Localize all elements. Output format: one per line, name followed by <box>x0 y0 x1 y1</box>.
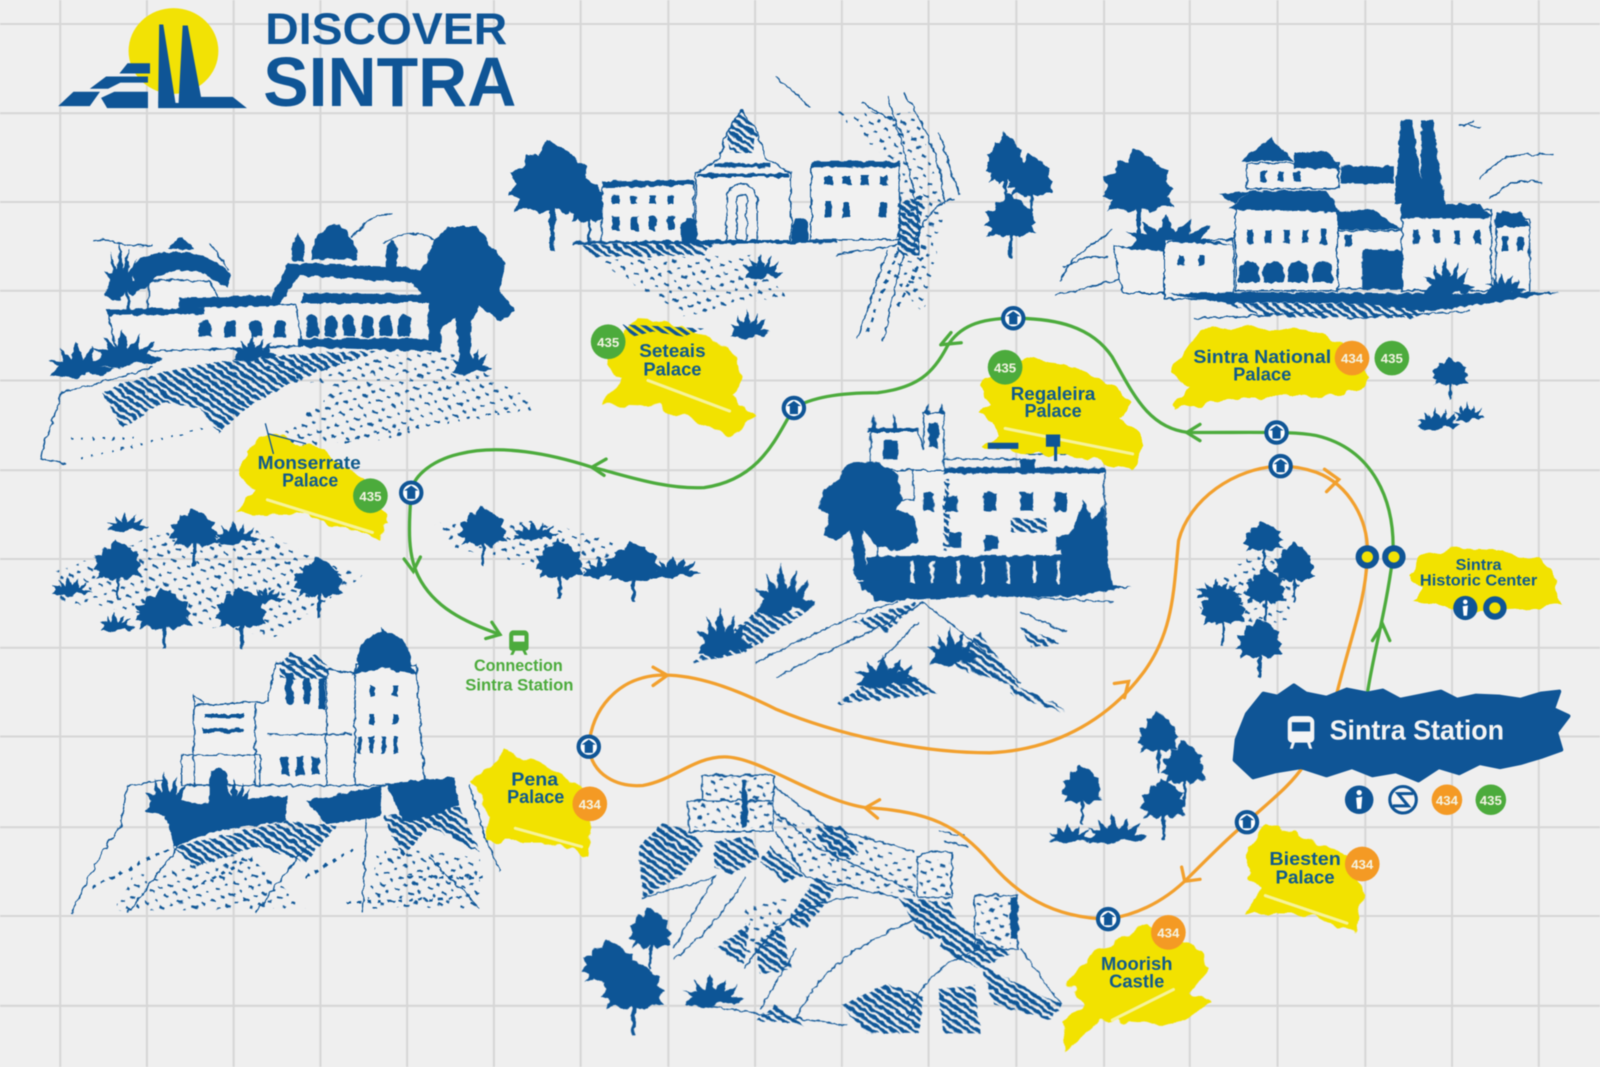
connection label <box>465 630 573 695</box>
label: Moorish Castle: Moorish <box>1101 953 1172 974</box>
label: Monserrate Palace <box>258 452 361 491</box>
illustration: Monserrate Palace <box>41 214 536 464</box>
icon: chimneys and stepped roofs <box>58 24 247 108</box>
highlight: Regaleira <box>978 357 1145 469</box>
illustration: forest middle <box>434 506 701 602</box>
green route 435 <box>404 318 1393 694</box>
icon: information <box>1453 596 1477 620</box>
badge 434 Biesten: 434 <box>1351 857 1374 872</box>
label: Sintra Historic Center: Sintra <box>1456 557 1502 574</box>
label: Seteais Palace: Palace <box>643 358 702 379</box>
illustration: forest left <box>51 508 362 650</box>
label: Sintra National Palace: Palace <box>1233 363 1291 384</box>
badge 434: 434 <box>1436 793 1459 808</box>
arrows <box>404 333 1390 641</box>
label: Seteais Palace <box>639 340 706 379</box>
label: Sintra Historic Center: Historic Center <box>1420 573 1537 590</box>
highlight: Pena <box>471 750 592 855</box>
icon: bus operator <box>1390 786 1416 813</box>
badge 434 National <box>1335 341 1369 375</box>
station: Sintra Station <box>1235 685 1568 780</box>
label: Pena Palace: Palace <box>507 786 564 807</box>
label: Monserrate Palace: Monserrate <box>258 452 361 473</box>
connection label: Sintra Station <box>465 676 573 695</box>
label highlights: yellow brush marks <box>237 318 1564 1051</box>
orange route 434 <box>589 466 1367 919</box>
badge 435 Regaleira <box>988 350 1022 385</box>
badge 434 Pena: 434 <box>579 797 601 812</box>
badge 435 National <box>1374 341 1409 375</box>
badge 434 Pena <box>572 786 607 821</box>
highlight: Monserrate <box>237 435 390 541</box>
title <box>263 3 516 121</box>
illustration: Moorish Castle <box>582 775 1061 1035</box>
badge 435 Seteais <box>591 324 626 359</box>
label: Regaleira Palace: Palace <box>1024 400 1082 421</box>
label: Regaleira Palace <box>1011 383 1096 421</box>
label: Biesten Palace: Palace <box>1276 866 1335 887</box>
badge 434 National: 434 <box>1341 351 1364 366</box>
label: Sintra National Palace: Sintra National <box>1193 346 1331 367</box>
icon: stop marker <box>1486 599 1504 617</box>
illustration: forest right <box>1194 521 1314 678</box>
illustration: Seteais Palace <box>508 77 959 342</box>
label: Biesten Palace <box>1269 848 1341 887</box>
icon: information <box>1345 785 1373 814</box>
badge 435 Regaleira: 435 <box>994 360 1016 375</box>
highlight: Historic Center <box>1408 548 1564 612</box>
label: Sintra Historic Center <box>1420 557 1537 620</box>
badge 435 National: 435 <box>1381 351 1403 366</box>
label: Moorish Castle <box>1101 953 1172 991</box>
illustration: Sintra National Palace <box>1056 120 1559 318</box>
label: Biesten Palace: Biesten <box>1269 848 1341 869</box>
title: SINTRA <box>263 43 516 121</box>
icon: train <box>509 630 529 655</box>
label: Moorish Castle: Castle <box>1109 970 1164 991</box>
route badges <box>353 324 1409 950</box>
label: Monserrate Palace: Palace <box>282 470 338 491</box>
badge 435 Seteais: 435 <box>597 335 619 350</box>
label: Regaleira Palace: Regaleira <box>1011 383 1096 404</box>
badge 435: 435 <box>1480 793 1502 808</box>
badge 434 Moorish: 434 <box>1157 925 1180 940</box>
station service icons <box>1345 784 1506 815</box>
badge 435 Monserrate: 435 <box>359 489 381 504</box>
illustration: small tree on rock <box>1416 357 1485 431</box>
station name: Sintra Station <box>1330 715 1504 746</box>
illustration: Pena Palace <box>71 626 500 913</box>
arrows <box>653 469 1339 881</box>
highlight: Biesten <box>1245 824 1362 933</box>
badge 434 <box>1432 784 1462 815</box>
title: DISCOVER <box>265 3 507 54</box>
label: Pena Palace <box>507 768 564 807</box>
icon: sun <box>129 8 218 94</box>
badge 435 Monserrate <box>353 478 388 513</box>
badge 434 Moorish <box>1151 915 1186 950</box>
label: Seteais Palace: Seteais <box>639 340 706 361</box>
icon: train <box>1288 716 1314 749</box>
highlight: National <box>1171 327 1372 408</box>
label: Pena Palace: Pena <box>511 768 559 789</box>
badge 435 <box>1476 784 1506 815</box>
highlight: Seteais <box>602 318 753 436</box>
logo: sun and chimneys with title <box>58 3 516 121</box>
route stops <box>401 308 1403 929</box>
label: Sintra National Palace <box>1193 346 1331 384</box>
badge 434 Biesten <box>1345 847 1380 881</box>
illustration: forest by Moorish Castle <box>1048 711 1205 844</box>
highlight: Moorish <box>1061 923 1212 1051</box>
illustration: top centre trees <box>984 132 1053 259</box>
connection label: Connection <box>474 656 563 675</box>
illustration: Regaleira Palace <box>692 404 1133 714</box>
